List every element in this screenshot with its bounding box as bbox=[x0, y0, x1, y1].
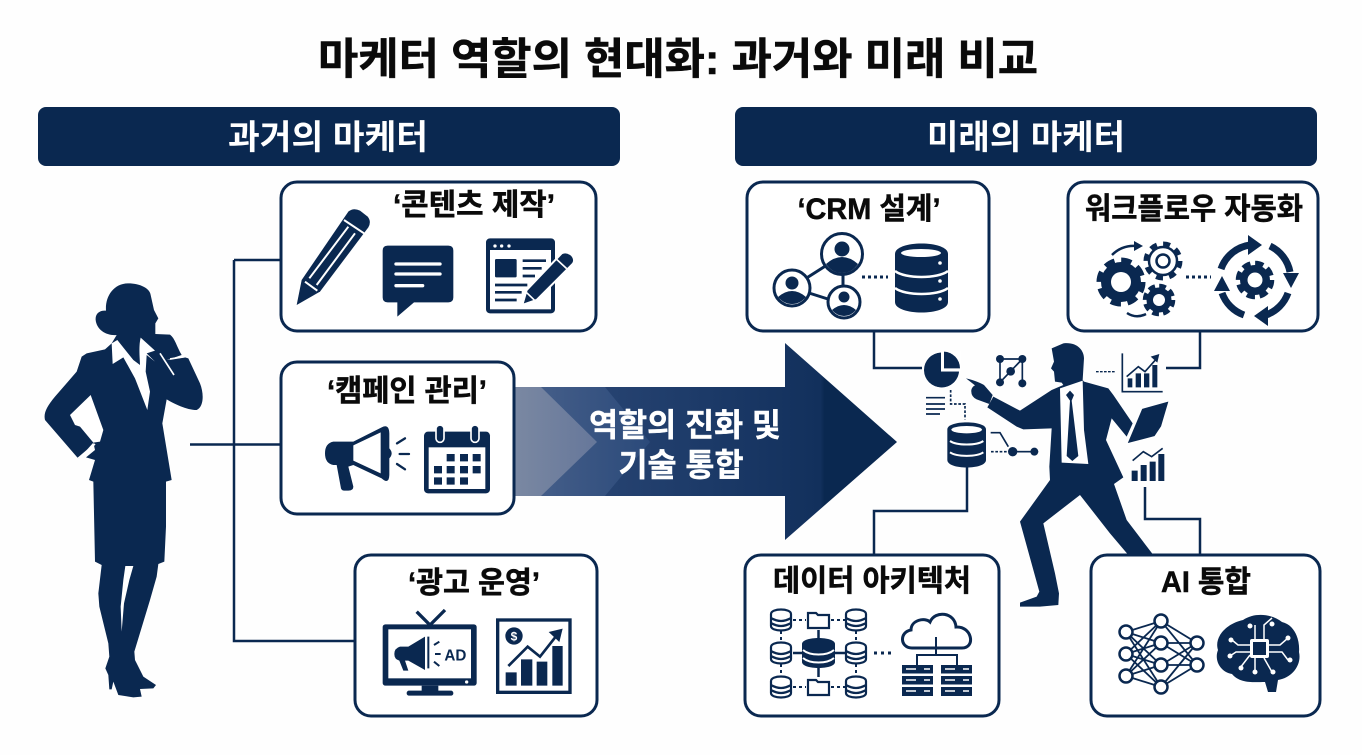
panel: data architecture bbox=[745, 555, 999, 716]
heading: AI 통합 bbox=[1161, 566, 1251, 599]
dotted link bbox=[1186, 276, 1211, 278]
icon: customer network bbox=[774, 234, 862, 318]
dotted link bbox=[874, 652, 892, 654]
header: past marketer bbox=[38, 107, 620, 166]
icon: data mesh bbox=[771, 610, 866, 698]
icon: revenue chart: $ bbox=[511, 630, 518, 644]
panel: AI integration bbox=[1091, 555, 1320, 716]
heading: 데이터 아키텍처 bbox=[773, 565, 971, 598]
header: future marketer: 미래의 마케터 bbox=[927, 119, 1125, 157]
connector lines: future roles bbox=[874, 331, 1200, 555]
icon: neural network bbox=[1120, 614, 1204, 694]
title: 마케터 역할의 현대화: 과거와 미래 비교 bbox=[318, 36, 1038, 84]
icon: database bbox=[895, 244, 948, 312]
panel: campaign management bbox=[281, 362, 514, 514]
figure: woman silhouette bbox=[45, 283, 203, 697]
heading: ‘광고 운영’ bbox=[408, 567, 540, 600]
heading: ‘CRM 설계’ bbox=[798, 193, 940, 226]
icon: growth chart bbox=[1122, 353, 1163, 392]
arrow: role evolution bbox=[515, 343, 897, 540]
heading: ‘콘텐츠 제작’ bbox=[393, 189, 555, 222]
icon: database bbox=[947, 422, 986, 467]
panel: content production bbox=[281, 182, 596, 331]
icon: network nodes bbox=[996, 355, 1026, 387]
panel: ad operations bbox=[355, 555, 597, 716]
heading: 워크플로우 자동화 bbox=[1085, 193, 1303, 226]
header: future marketer bbox=[735, 107, 1317, 166]
data nodes bbox=[991, 433, 1038, 456]
icons bbox=[325, 425, 490, 493]
dashed link bbox=[1096, 370, 1115, 374]
dashed link bbox=[951, 390, 965, 419]
icon: megaphone bbox=[325, 426, 409, 491]
icon: AI brain bbox=[1217, 615, 1300, 692]
icons bbox=[297, 209, 574, 317]
icon: pencil bbox=[297, 209, 370, 305]
arrow label: 역할의 진화 및 bbox=[589, 407, 781, 443]
man body bbox=[966, 343, 1169, 607]
icon: TV with ad bbox=[383, 610, 477, 696]
icons bbox=[383, 610, 570, 696]
panel: CRM design bbox=[747, 182, 989, 331]
icon: chat bubble bbox=[383, 246, 453, 317]
icon: revenue chart bbox=[498, 620, 570, 692]
panel: workflow automation bbox=[1068, 182, 1318, 331]
arrow: role evolution: 기술 통합 bbox=[618, 447, 744, 483]
icon: small bar chart bbox=[1132, 448, 1164, 481]
connector lines: past roles bbox=[190, 260, 355, 641]
figure: man silhouette with analytics icons bbox=[924, 343, 1169, 607]
icon: pie chart bbox=[924, 351, 962, 414]
icon: cloud servers bbox=[902, 614, 972, 696]
icon: TV with ad: AD bbox=[444, 648, 466, 665]
icon: gears bbox=[1100, 241, 1180, 316]
arrow chevron bands bbox=[515, 387, 650, 496]
heading: ‘캠페인 관리’ bbox=[327, 375, 487, 408]
icon: browser with pencil bbox=[486, 238, 574, 313]
header: past marketer: 과거의 마케터 bbox=[228, 119, 428, 157]
dotted link bbox=[862, 276, 888, 278]
icon: automation cycle bbox=[1214, 235, 1299, 326]
icon: calendar bbox=[424, 425, 490, 493]
